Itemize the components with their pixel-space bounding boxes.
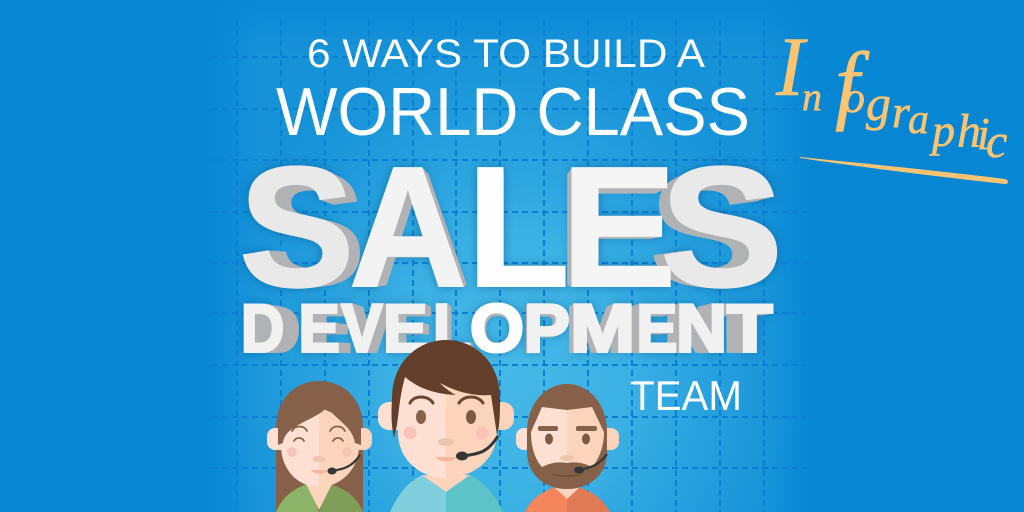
heading: DEVELOPMENT 3D lettering: N xyxy=(664,295,712,365)
heading: DEVELOPMENT 3D lettering: E xyxy=(313,294,352,365)
heading: DEVELOPMENT 3D lettering: V xyxy=(342,289,382,366)
heading: SALES 3D lettering: L xyxy=(470,141,565,319)
woman ears xyxy=(267,428,372,450)
central man mouth xyxy=(435,457,457,462)
heading: SALES 3D lettering: L xyxy=(467,130,570,322)
heading: DEVELOPMENT 3D lettering: E xyxy=(383,291,427,367)
bearded man eyes xyxy=(545,434,590,444)
heading: DEVELOPMENT 3D lettering: L xyxy=(433,289,470,366)
heading: SALES 3D lettering: A xyxy=(349,132,467,323)
central man cheeks xyxy=(404,426,488,440)
woman hair xyxy=(276,381,363,512)
heading: SALES 3D lettering: S xyxy=(258,140,365,318)
heading: DEVELOPMENT 3D lettering: D xyxy=(241,290,284,366)
label: team: TEAM xyxy=(630,372,742,419)
heading: DEVELOPMENT 3D lettering: L xyxy=(438,295,473,365)
woman body xyxy=(276,484,363,512)
handwritten label: infographic: c xyxy=(986,115,1007,168)
handwritten label: infographic: r xyxy=(892,86,911,137)
handwritten label: infographic: n xyxy=(802,74,822,119)
heading: DEVELOPMENT 3D lettering: N xyxy=(676,290,727,366)
heading: DEVELOPMENT 3D lettering: O xyxy=(473,294,523,365)
central man ears xyxy=(378,402,514,430)
central man headset xyxy=(456,436,498,460)
heading: DEVELOPMENT 3D lettering: E xyxy=(392,295,433,366)
handwritten label: infographic: h xyxy=(957,105,981,158)
woman face xyxy=(281,407,359,487)
handwritten label: infographic: i xyxy=(977,108,990,159)
woman headset xyxy=(328,455,360,474)
woman fringe xyxy=(278,385,361,445)
heading: DEVELOPMENT 3D lettering: E xyxy=(628,295,666,365)
heading: DEVELOPMENT 3D lettering: P xyxy=(523,295,566,365)
central man hair xyxy=(392,340,500,438)
heading: DEVELOPMENT 3D lettering: T xyxy=(712,295,754,366)
heading: DEVELOPMENT 3D lettering: P xyxy=(524,291,570,366)
heading: SALES 3D lettering: A xyxy=(360,140,470,318)
bearded man body xyxy=(525,487,610,512)
bearded man ears xyxy=(516,428,619,450)
bearded man headset xyxy=(574,454,607,474)
bearded man hair and beard xyxy=(527,384,607,489)
handwritten label: infographic: a xyxy=(908,97,929,143)
bearded man nose xyxy=(560,455,574,461)
woman cheeks xyxy=(287,447,352,457)
woman mouth xyxy=(311,470,328,474)
character: central man with headset xyxy=(378,340,514,512)
bearded man mouth xyxy=(549,473,585,477)
heading: SALES 3D lettering: S xyxy=(649,141,764,319)
heading: DEVELOPMENT 3D lettering xyxy=(241,289,773,367)
heading: DEVELOPMENT 3D lettering: E xyxy=(636,289,677,366)
handwritten label: infographic: I xyxy=(775,20,808,114)
heading: DEVELOPMENT 3D lettering: M xyxy=(566,295,626,365)
title line: world class: WORLD CLASS xyxy=(276,74,750,150)
heading: DEVELOPMENT 3D lettering: V xyxy=(353,295,391,365)
character: bearded man with headset xyxy=(516,384,619,512)
underline stroke xyxy=(800,157,1008,184)
central man brows xyxy=(410,397,483,403)
handwritten label: infographic: g xyxy=(866,75,891,131)
heading: DEVELOPMENT 3D lettering: E xyxy=(298,290,340,366)
title line: 6 ways to build a: 6 WAYS TO BUILD A xyxy=(307,32,705,76)
central man body xyxy=(390,475,503,512)
central man eyes xyxy=(416,410,476,424)
heading: SALES 3D lettering: E xyxy=(557,140,665,318)
heading: DEVELOPMENT 3D lettering: O xyxy=(470,290,524,366)
bearded man brows xyxy=(538,426,597,431)
heading: SALES 3D lettering: E xyxy=(561,132,676,323)
handwritten label: infographic: p xyxy=(929,105,955,156)
heading: DEVELOPMENT 3D lettering: M xyxy=(570,290,635,366)
handwritten label: infographic: f xyxy=(835,36,870,133)
bearded man face xyxy=(531,407,604,467)
woman nose xyxy=(312,456,326,462)
character: woman with headset xyxy=(267,381,372,512)
heading: SALES 3D lettering: S xyxy=(239,132,354,323)
heading: DEVELOPMENT 3D lettering: D xyxy=(260,294,300,365)
woman eyes and brows xyxy=(292,426,345,441)
heading: DEVELOPMENT 3D lettering: T xyxy=(727,291,773,367)
central man nose xyxy=(438,438,454,446)
central man face xyxy=(398,370,497,478)
heading: SALES 3D lettering: S xyxy=(660,131,783,323)
handwritten label: infographic: o xyxy=(843,73,865,122)
heading: SALES 3D lettering xyxy=(239,130,783,323)
